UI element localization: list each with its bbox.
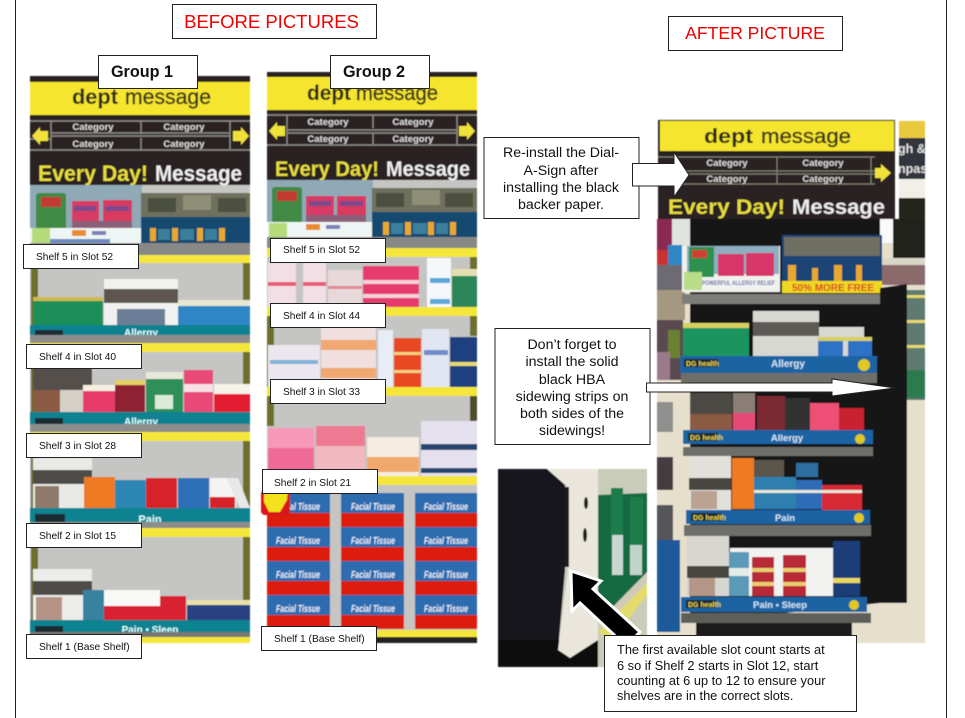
label: group 2 shelf 1 (262, 626, 376, 650)
sign: dial-a-sign header: Every Day! (668, 196, 785, 219)
shelf 1 products: facial tissue: Facial Tissue (276, 569, 320, 581)
label: group 1 shelf 1: Shelf 1 (Base Shelf) (39, 642, 130, 653)
label: group 2: Group 2 (343, 63, 405, 81)
label: group 1 shelf 4: Shelf 4 in Slot 40 (39, 352, 116, 363)
sign: neighbouring aisle sign (898, 121, 927, 220)
header sign: group 1: Every Day! (38, 161, 148, 186)
shelf front: allergy (30, 325, 250, 339)
photo: sidewing close-up (498, 469, 647, 667)
shelf 1 products: facial tissue: Facial Tissue (351, 603, 395, 615)
header sign: group 2: Message (386, 158, 470, 181)
header sign: group 1: dept (72, 86, 118, 109)
header sign: group 1: Category (163, 139, 205, 150)
shelf 1 products: facial tissue: Facial Tissue (424, 501, 468, 513)
arrow: white arrow to sidewing strip (646, 379, 895, 396)
callout: install the sidewing strips (495, 328, 650, 444)
photo: top shelf tray and pain relief box: 50% MORE FREE (792, 283, 874, 294)
shelf 1 products: facial tissue: Facial Tissue (351, 569, 395, 581)
callout: first available slot count: counting at 6 up to 12 to ensure your (617, 673, 826, 688)
callout: install the sidewing strips: Don’t forget to (527, 337, 617, 353)
label: group 2 shelf 2 (262, 470, 378, 494)
callout: first available slot count (604, 636, 856, 712)
photo: store background (657, 219, 925, 643)
sign: dial-a-sign header: dept (704, 126, 753, 148)
callout: re-install the dial-a-sign: backer paper. (518, 197, 604, 213)
label: group 1 shelf 4 (26, 344, 142, 368)
header sign: group 2: Category (392, 134, 434, 145)
sign: dial-a-sign header: Category (802, 174, 844, 185)
header sign: group 2 (267, 72, 477, 181)
shelf 1 products: group 1 (33, 569, 250, 620)
header sign: group 1: Message (155, 161, 242, 186)
icon: red and yellow hand sign (261, 490, 290, 515)
header sign: group 2: Category (307, 117, 349, 128)
arrow: white arrow to dial-a-sign (632, 152, 689, 197)
shelf 1 products: facial tissue: Facial Tissue (276, 501, 320, 513)
shelf 1 products: facial tissue: Facial Tissue (276, 535, 320, 547)
sign: dial-a-sign header: Message (792, 196, 885, 219)
title: after picture: AFTER PICTURE (685, 23, 825, 43)
sign: dial-a-sign header: message (761, 126, 851, 148)
shelf front: allergy (680, 356, 877, 373)
shelf front: pain and sleep (681, 597, 867, 612)
label: group 2 shelf 4 (270, 304, 386, 328)
photo: pain shelf (689, 456, 862, 510)
callout: re-install the dial-a-sign: A-Sign after (524, 163, 599, 179)
callout: re-install the dial-a-sign (484, 138, 639, 218)
callout: re-install the dial-a-sign: Re-install the Dial- (503, 145, 619, 161)
shelf 2 products: group 1 (33, 458, 250, 508)
shelf 1 products: facial tissue: Facial Tissue (276, 603, 320, 615)
label: group 2 (330, 56, 430, 88)
header sign: group 2: Every Day! (275, 158, 379, 181)
shelf front: allergy: DG health (686, 361, 719, 368)
panel: group 1 planogram (30, 76, 250, 643)
shelf 1 products: facial tissue: Facial Tissue (424, 569, 468, 581)
photo: upper allergy shelf (683, 311, 872, 357)
shelf front: allergy: Allergy (124, 328, 158, 339)
header sign: group 1: Category (72, 122, 114, 133)
label: group 1 shelf 3 (26, 434, 142, 458)
label: group 2 shelf 3 (270, 380, 386, 404)
shelf front: allergy lower: Allergy (771, 433, 804, 444)
shelf 1 products: facial tissue: Facial Tissue (351, 535, 395, 547)
label: group 1 shelf 3: Shelf 3 in Slot 28 (39, 441, 116, 452)
shelf 1 products: facial tissue: Facial Tissue (424, 535, 468, 547)
photo: top shelf tray and pain relief box: POWERFUL ALLERGY RELIEF (702, 280, 775, 287)
shelf front: allergy lower (683, 430, 873, 444)
shelf 1 products: facial tissue: Facial Tissue (351, 501, 395, 513)
panel: after photo of the finished display (657, 120, 927, 643)
title: before pictures: BEFORE PICTURES (184, 11, 359, 32)
label: group 1 (98, 56, 198, 88)
title: before pictures (172, 4, 376, 38)
shelf front: allergy 2: Allergy (124, 417, 158, 428)
header sign: group 2: message (356, 82, 438, 105)
shelf 1 products: facial tissue: Facial Tissue (424, 603, 468, 615)
callout: install the sidewing strips: sidewings! (539, 423, 605, 439)
sign: dial-a-sign header: Category (802, 158, 844, 169)
shelf 3 products: group 2 (268, 327, 477, 387)
label: group 1: Group 1 (111, 63, 173, 81)
header sign: group 1 (30, 76, 250, 186)
header sign: group 2: Category (392, 117, 434, 128)
shelf 5 products: group 1 (30, 185, 250, 243)
label: group 1 shelf 5: Shelf 5 in Slot 52 (36, 252, 113, 263)
header sign: group 1: Category (72, 139, 114, 150)
callout: first available slot count: 6 so if Shelf 2 starts in Slot 12, start (617, 658, 819, 673)
shelf 2 products: group 2 (268, 421, 477, 476)
label: group 2 shelf 5: Shelf 5 in Slot 52 (283, 245, 360, 256)
sign: dial-a-sign header (658, 120, 895, 220)
label: group 2 shelf 4: Shelf 4 in Slot 44 (283, 311, 360, 322)
callout: install the sidewing strips: both sides of the (520, 406, 624, 422)
header sign: group 1: Category (163, 122, 205, 133)
sign: dial-a-sign header: Category (706, 158, 748, 169)
callout: first available slot count: shelves are in the correct slots. (617, 688, 793, 703)
shelf front: allergy lower: DG health (690, 435, 723, 442)
shelf front: pain (686, 510, 870, 524)
photo: top shelf tray and pain relief box (682, 235, 882, 304)
shelf 1 products: facial tissue (267, 493, 477, 629)
title: after picture (668, 16, 842, 50)
shelf front: pain and sleep: Pain • Sleep (753, 600, 807, 611)
callout: install the sidewing strips: black HBA (539, 372, 606, 388)
shelf front: allergy: Allergy (771, 359, 805, 370)
callout: first available slot count: The first available slot count starts at (617, 642, 825, 657)
shelf front: pain (30, 508, 250, 526)
header sign: group 2: dept (307, 82, 351, 105)
shelf 3 products: group 1 (33, 368, 250, 412)
shelf front: pain and sleep: DG health (688, 602, 721, 609)
callout: install the sidewing strips: sidewing strips on (516, 389, 628, 405)
label: group 1 shelf 5 (24, 244, 138, 268)
label: group 1 shelf 2 (26, 524, 142, 548)
header sign: group 2: Category (307, 134, 349, 145)
shelf front: pain and sleep: Pain • Sleep (122, 625, 178, 636)
callout: install the sidewing strips: install the solid (525, 354, 619, 370)
sign: neighbouring aisle sign: npas (898, 162, 927, 176)
label: group 2 shelf 3: Shelf 3 in Slot 33 (283, 387, 360, 398)
sign: dial-a-sign header: Category (706, 174, 748, 185)
label: group 2 shelf 2: Shelf 2 in Slot 21 (274, 478, 351, 489)
label: group 2 shelf 1: Shelf 1 (Base Shelf) (274, 634, 365, 645)
panel: group 2 planogram (261, 72, 477, 643)
callout: re-install the dial-a-sign: installing the black (503, 180, 620, 196)
shelf front: pain: Pain (775, 513, 795, 524)
shelf 4 products: group 1 (33, 279, 250, 325)
sign: neighbouring aisle sign: gh & (898, 142, 926, 156)
shelf front: pain: Pain (138, 514, 162, 526)
photo: pain and sleep shelf (687, 536, 860, 596)
header sign: group 1: message (125, 86, 211, 109)
shelf front: allergy 2 (30, 412, 250, 428)
label: group 2 shelf 5 (270, 238, 386, 262)
shelf 5 products: group 2 (267, 180, 477, 237)
shelf 4 products: group 2 (268, 258, 477, 307)
label: group 1 shelf 2: Shelf 2 in Slot 15 (39, 531, 116, 542)
photo: lower allergy shelf (690, 393, 864, 430)
arrow: black arrow pointing to first slot (571, 571, 640, 646)
photo: display back panel (690, 219, 880, 623)
photo: black sidewing strip (877, 284, 907, 603)
shelf front: pain: DG health (693, 515, 726, 522)
label: group 1 shelf 1 (26, 634, 142, 658)
shelf front: pain and sleep (30, 620, 250, 636)
